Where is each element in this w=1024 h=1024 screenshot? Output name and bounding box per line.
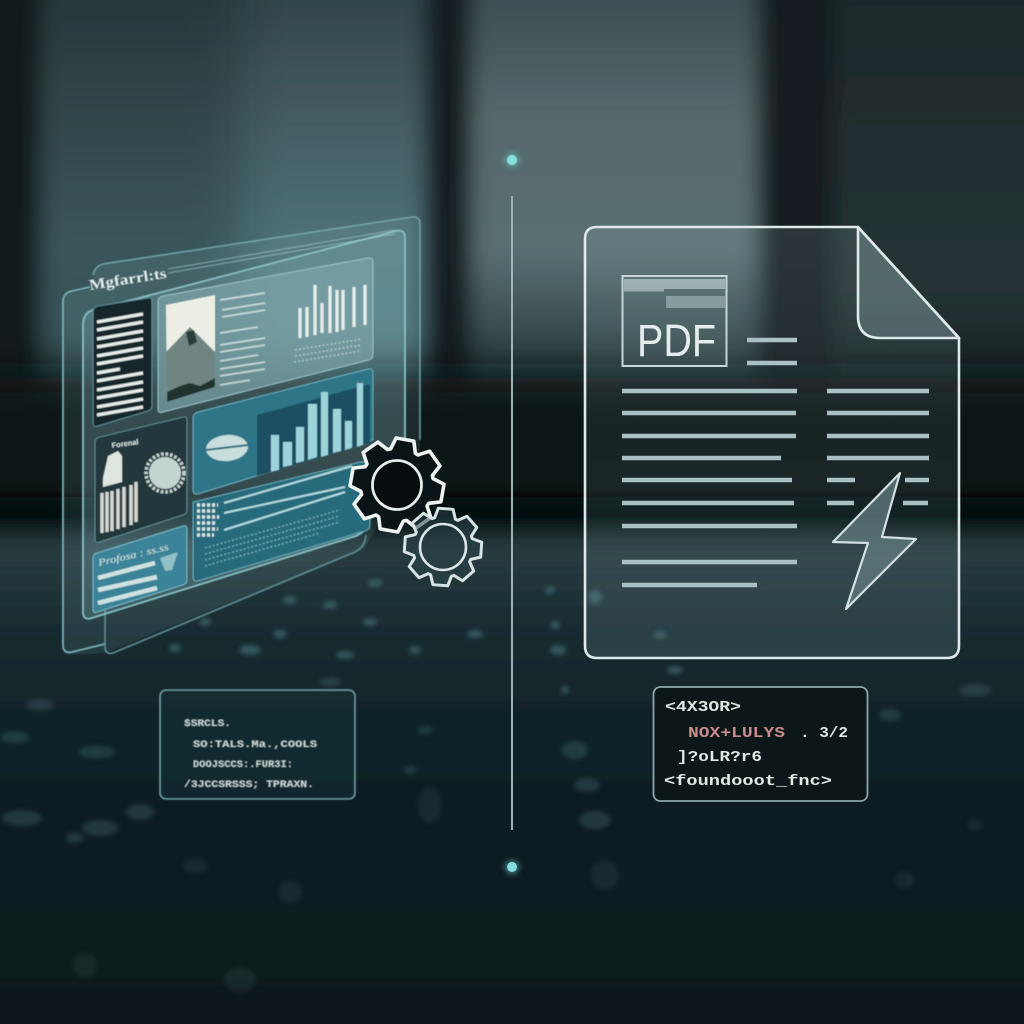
cell: building and ring — [95, 417, 187, 543]
cell: summary — [93, 526, 187, 613]
folded corner — [858, 227, 959, 338]
thin bars — [300, 285, 365, 338]
icon: large gear — [344, 432, 450, 538]
code box: right: NOX+LULYS — [688, 725, 785, 742]
pixel icon — [197, 505, 219, 535]
document outline — [585, 227, 959, 658]
oval icon — [205, 433, 249, 463]
summary label: Profosa : ss.ss — [96, 542, 170, 569]
code box: right: . 3/2 — [800, 725, 848, 742]
cell: text column — [93, 298, 152, 427]
code box: right — [654, 687, 868, 801]
cell: list with lines — [193, 462, 370, 581]
code box: left — [160, 690, 355, 799]
PDF badge: PDF — [637, 315, 716, 366]
floor light dots — [1, 579, 991, 993]
axis labels — [294, 339, 362, 362]
blob — [160, 552, 178, 571]
photo — [166, 295, 215, 402]
mini bars — [102, 482, 136, 533]
text lines: header — [747, 340, 797, 363]
bars — [271, 383, 363, 472]
code box: left: $SRCLS. — [184, 718, 231, 730]
building — [103, 451, 122, 487]
text lines: side column — [827, 391, 929, 503]
cell label: Forenal — [111, 437, 139, 450]
code box: right: ]?oLR?r6 — [677, 749, 762, 766]
bottom node — [505, 860, 519, 874]
center divider — [505, 153, 519, 874]
code box: right: <4X3OR> — [665, 699, 741, 716]
front glass panel — [83, 231, 405, 619]
photo caption lines — [220, 293, 265, 385]
code box: left: SO:TALS.Ma.,COOLS — [193, 739, 317, 751]
cell: teal bar chart — [193, 369, 373, 494]
icon: lightning bolt — [833, 473, 916, 609]
code box: left: DOOJSCCS:.FUR3I: — [193, 759, 293, 771]
title underline — [168, 230, 395, 273]
code box: right: <foundooot_fnc> — [664, 773, 832, 790]
text lines: main column — [622, 391, 797, 585]
ring gauge — [146, 454, 184, 492]
cell: photo, text and thin bar chart — [158, 258, 373, 413]
code box: left: /3JCCSRSSS; TPRAXN. — [184, 779, 314, 791]
rear glass frame — [63, 217, 420, 655]
icon: small gear — [402, 506, 484, 588]
PDF badge — [622, 276, 726, 366]
plot area — [257, 384, 370, 476]
panel: PDF document — [585, 227, 959, 658]
panel title: Mgfarrl:ts — [88, 266, 168, 294]
panel: dashboard stack — [63, 217, 420, 655]
top node — [505, 153, 519, 167]
